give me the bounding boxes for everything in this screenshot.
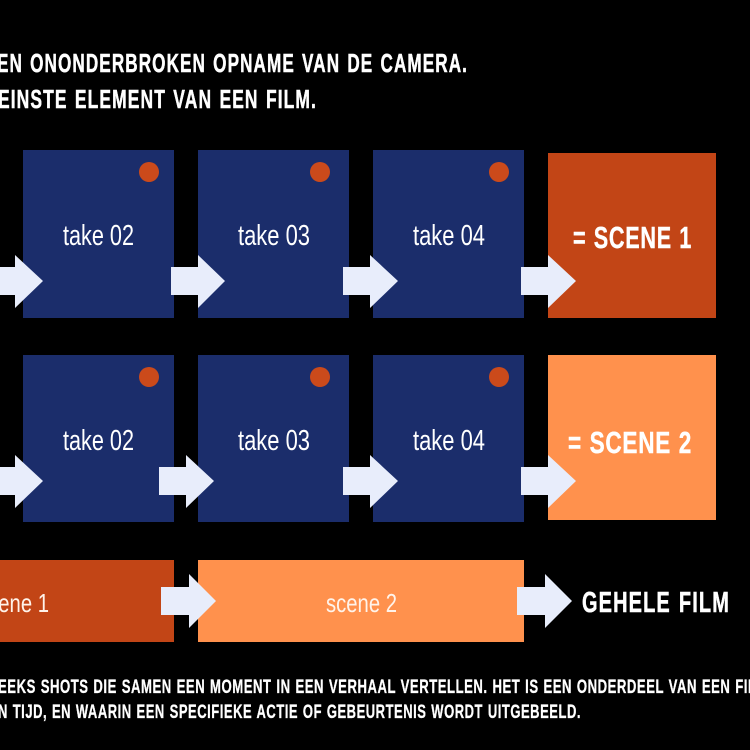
take 04 card: take 04 [413, 220, 485, 252]
arrow: into take 02 [0, 255, 43, 308]
scene 1 bar [0, 560, 174, 642]
arrow: take 03 to take 04 [343, 255, 398, 308]
take 03 card [198, 150, 349, 318]
text block: scene definition [0, 676, 750, 723]
arrow: take 03 to take 04 [343, 455, 398, 508]
heading: shot definition [0, 50, 468, 114]
take 03 card: take 03 [238, 220, 310, 252]
take 04 card [373, 355, 524, 522]
take 02 card: take 02 [63, 425, 134, 457]
arrow: take 04 to scene 1 [521, 255, 576, 308]
take 02 card: take 02 [63, 220, 134, 252]
take 03 card [198, 355, 349, 522]
take 02 card [23, 150, 174, 318]
heading: shot definition: EINSTE ELEMENT VAN EEN FILM. [0, 86, 317, 114]
take 04 card [373, 150, 524, 318]
arrow: take 04 to scene 2 [521, 455, 576, 508]
arrow: scene 1 to scene 2 [161, 574, 216, 628]
arrow: scene 2 to whole film [517, 574, 572, 628]
take 03 card: take 03 [238, 425, 310, 457]
panel: scene 1 row [0, 150, 716, 318]
take 04 card: take 04 [413, 425, 485, 457]
scene 2 bar [198, 560, 524, 642]
panel: scene 2 row [0, 355, 716, 522]
arrow: take 02 to take 03 [159, 455, 214, 508]
scene 2 bar: scene 2 [326, 588, 397, 618]
scene 2 result card [548, 355, 716, 520]
arrow: into take 02 [0, 455, 43, 508]
scene 1 result card: = SCENE 1 [573, 220, 692, 255]
scene 2 result card: = SCENE 2 [568, 425, 692, 460]
take 02 card [23, 355, 174, 522]
panel: whole film row [0, 560, 730, 642]
scene 1 result card [548, 153, 716, 318]
arrow: take 02 to take 03 [171, 255, 225, 308]
heading: shot definition: EN ONONDERBROKEN OPNAME VAN DE CAMERA. [0, 50, 468, 78]
